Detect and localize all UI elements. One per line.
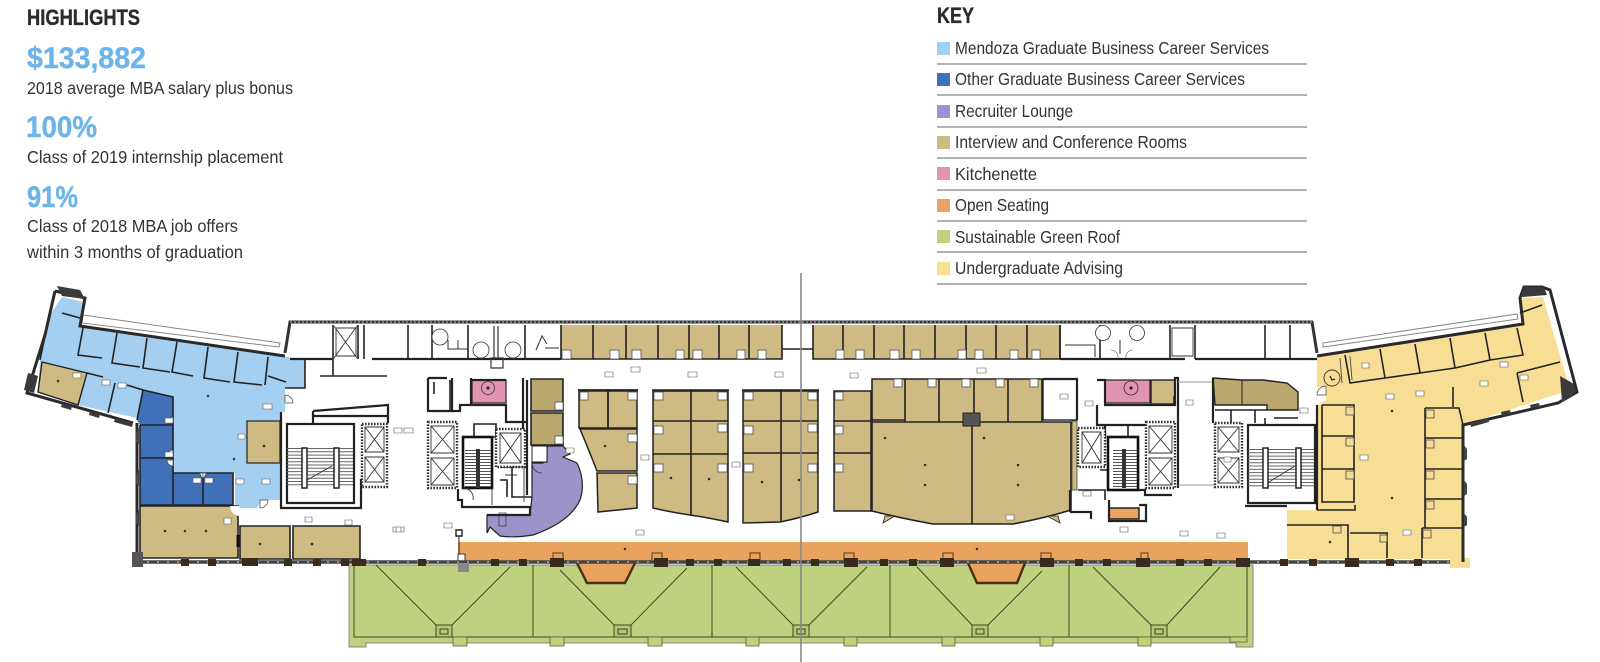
- core walls east: [1213, 378, 1317, 510]
- caption: average salary: 2018 average MBA salary plus bonus: [27, 78, 293, 98]
- panel: highlights: [26, 5, 293, 262]
- caption: job offers line 2: within 3 months of graduation: [26, 242, 243, 262]
- floor plan: [24, 273, 1577, 662]
- south exterior wall: [132, 428, 1467, 572]
- open seating: [456, 508, 1248, 583]
- interview room near stairs: [247, 421, 280, 463]
- central east core: [1043, 378, 1178, 521]
- heading: highlights: HIGHLIGHTS: [27, 5, 140, 30]
- green roof: [349, 565, 1253, 647]
- key row: Interview rooms: Interview and Conference Rooms: [955, 132, 1187, 152]
- undergraduate advising wing: [1287, 297, 1570, 568]
- wing outer walls: [27, 287, 1577, 562]
- stat: internship placement: 100%: [26, 111, 97, 144]
- key row: Kitchenette: Kitchenette: [955, 164, 1037, 184]
- west elevators: [362, 424, 387, 487]
- stat: average salary: $133,882: [27, 42, 146, 75]
- kitchenettes: [472, 380, 1150, 403]
- heading: key: KEY: [937, 3, 974, 28]
- north interview rooms: [561, 325, 1060, 359]
- central interview rooms: [531, 378, 1298, 524]
- caption: job offers line 1: Class of 2018 MBA job offers: [27, 216, 238, 236]
- recruiter lounge: [487, 446, 582, 537]
- panel: key: [937, 3, 1307, 284]
- building core: walls, stairs and elevators: [24, 286, 1577, 562]
- other graduate career services offices: [137, 390, 233, 505]
- north service wall: [285, 322, 1317, 353]
- key row: Mendoza: Mendoza Graduate Business Career Services: [955, 38, 1269, 58]
- key row: Open Seating: Open Seating: [955, 195, 1049, 215]
- divider line: [800, 273, 802, 662]
- parapet strips: [82, 314, 1518, 347]
- Mendoza graduate career services wing: [38, 297, 305, 508]
- key row: Undergraduate Advising: Undergraduate Advising: [955, 258, 1123, 278]
- key row: Green Roof: Sustainable Green Roof: [955, 227, 1120, 247]
- west stairs: [287, 448, 353, 487]
- key row: Recruiter Lounge: Recruiter Lounge: [955, 101, 1073, 121]
- core walls west: [281, 405, 388, 508]
- room tags: [73, 362, 1528, 538]
- interview room in wing: [38, 362, 87, 405]
- lower left interview rooms: [140, 506, 360, 559]
- stat: job offers: 91%: [27, 181, 78, 214]
- caption: internship placement: Class of 2019 internship placement: [27, 147, 283, 167]
- central west core: [428, 378, 530, 515]
- key row: Other: Other Graduate Business Career Services: [955, 69, 1245, 89]
- east stairs: [1248, 449, 1314, 487]
- east elevators: [1215, 423, 1242, 487]
